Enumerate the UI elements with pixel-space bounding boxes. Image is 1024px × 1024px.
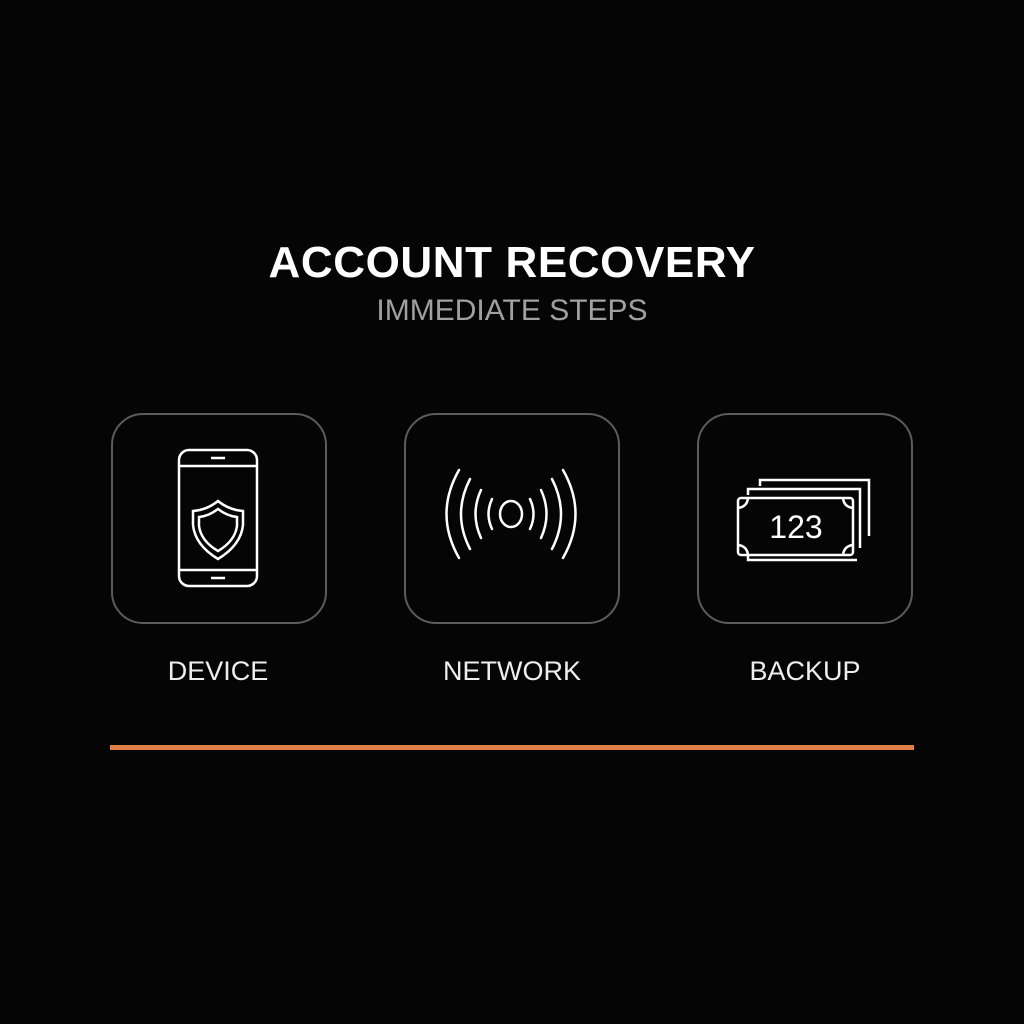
label: device: DEVICE: [168, 656, 268, 686]
icon: stacked bills: 123: [769, 508, 822, 544]
title: ACCOUNT RECOVERY: [268, 238, 756, 287]
panel: network: [404, 413, 620, 624]
panel: backup: [697, 413, 913, 624]
panel: device: [111, 413, 327, 624]
label: network: NETWORK: [443, 656, 581, 686]
icon: stacked bills: [736, 478, 870, 562]
subtitle: IMMEDIATE STEPS: [376, 294, 648, 327]
divider: orange accent line: [110, 745, 914, 750]
label: backup: BACKUP: [749, 656, 861, 686]
icon: signal waves: [445, 468, 577, 560]
icon: phone with shield: [178, 448, 258, 588]
